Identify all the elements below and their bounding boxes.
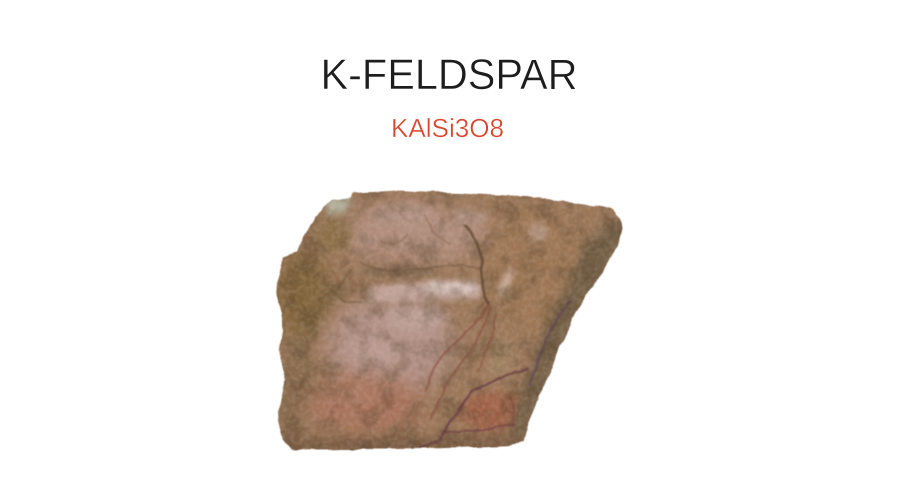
rock grain texture — [270, 185, 630, 455]
rock colour zones — [270, 197, 625, 456]
infographic canvas — [276, 59, 624, 452]
rock cracks — [318, 215, 570, 448]
illustration: k-feldspar rock specimen — [270, 185, 630, 456]
title: K-FELDSPAR — [320, 51, 578, 99]
chemical formula: KAlSi3O8 — [391, 113, 504, 143]
